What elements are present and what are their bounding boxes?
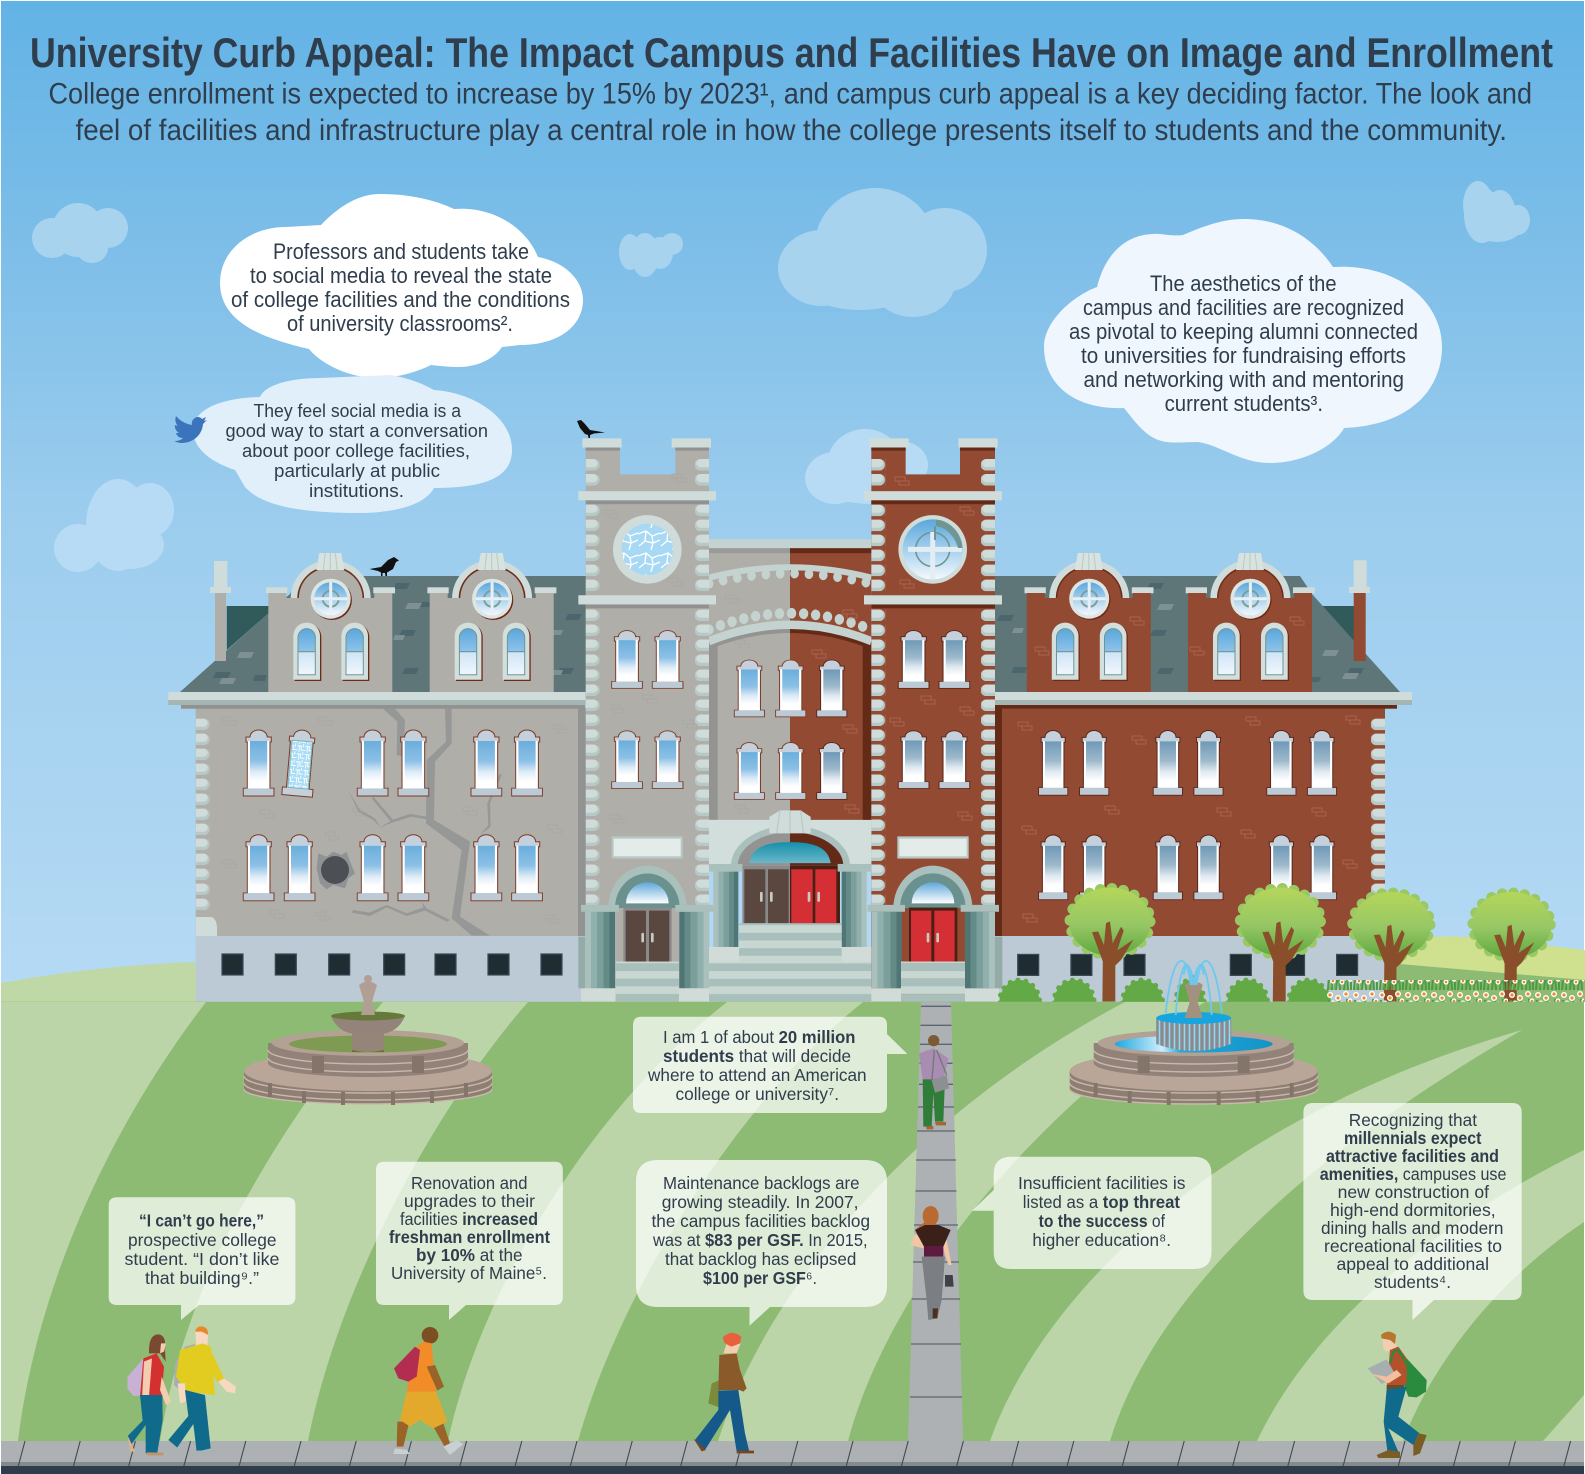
lower arch (709, 613, 871, 641)
cloud text: of college facilities and the conditions (231, 287, 570, 312)
bubble text: millennials expect (1344, 1128, 1482, 1148)
tower quoins (586, 459, 995, 906)
bubble text: student. “I don’t like (124, 1249, 280, 1269)
cloud text (226, 400, 488, 501)
person: girl with lilac backpack (127, 1334, 171, 1455)
entrances (578, 810, 1002, 1002)
hole in wall (317, 852, 355, 889)
person: student on phone on path (919, 1035, 949, 1129)
central towers and walls (578, 438, 1002, 1002)
cloud text: as pivotal to keeping alumni connected (1069, 319, 1418, 344)
speech bubble: 20 million students (633, 1017, 907, 1113)
bubble text: prospective college (128, 1230, 276, 1250)
bird on tower (577, 420, 605, 438)
speech bubble: millennials (1303, 1103, 1522, 1320)
cloud text: current students³. (1165, 391, 1323, 416)
bubble text: students⁴. (1374, 1272, 1451, 1292)
right cornice (995, 692, 1412, 709)
bubble text: I am 1 of about 20 million (663, 1027, 855, 1047)
bubble text: freshman enrollment (389, 1227, 550, 1247)
cloud text: to social media to reveal the state (250, 263, 552, 288)
shaded strips beside entrances (578, 937, 1002, 988)
tree 2 (1239, 888, 1321, 1002)
person: woman walking on path (911, 1206, 954, 1320)
cloud text: of university classrooms². (287, 311, 513, 336)
bubble text (647, 1027, 867, 1104)
cloud text: particularly at public (274, 460, 440, 481)
left tower entrance (581, 866, 714, 1002)
tree 3 (1352, 892, 1431, 1002)
bubble text: new construction of (1338, 1182, 1489, 1202)
trees (1069, 888, 1551, 1002)
right wing (995, 617, 1412, 1002)
bubble text: Renovation and (411, 1173, 528, 1193)
bubble text: listed as a top threat (1023, 1192, 1180, 1212)
fountain column (331, 975, 405, 1052)
tower and centre windows (612, 630, 970, 799)
bubble text (652, 1173, 870, 1288)
right fountain, running (1070, 961, 1318, 1105)
cloud text: to universities for fundraising efforts (1081, 343, 1406, 368)
sky (1, 1, 1584, 1002)
centre section wall (709, 539, 871, 820)
speech bubble: renovation (376, 1162, 563, 1320)
left wing windows, lower row (243, 835, 542, 901)
right wing base (995, 936, 1385, 1002)
right basement windows (1018, 954, 1358, 975)
main portico (709, 810, 871, 1002)
left fountain, dry and mossy (244, 975, 492, 1105)
right roof (995, 576, 1400, 692)
left dormers (266, 553, 556, 692)
pool (1115, 1036, 1273, 1052)
curb strip (1, 1466, 1584, 1474)
person: student with green backpack (1368, 1332, 1427, 1458)
cloud text: good way to start a conversation (226, 420, 488, 441)
cracked clock window (613, 515, 682, 584)
red brick marks (1018, 617, 1360, 922)
speech bubble: top threat (972, 1157, 1212, 1269)
bubble text: by 10% at the (416, 1245, 522, 1265)
icon: twitter bird (174, 416, 207, 443)
left wing windows, upper row (243, 730, 542, 796)
red tower wall (871, 448, 995, 1002)
left wing quoins (196, 719, 210, 914)
bubble text: “I can’t go here,” (139, 1211, 264, 1231)
person: boy in yellow shirt (168, 1326, 236, 1455)
water spray (1166, 961, 1222, 1015)
bubble text: attractive facilities and (1326, 1146, 1499, 1166)
upper arch (709, 567, 871, 584)
bubble text (389, 1173, 550, 1283)
red tower caps and bands (864, 438, 1002, 608)
bubble text: dining halls and modern (1321, 1218, 1503, 1238)
bubble text: was at $83 per GSF. In 2015, (652, 1230, 868, 1250)
corner stone (196, 917, 217, 936)
cloud text: and networking with and mentoring (1084, 367, 1404, 392)
brick marks (222, 717, 567, 923)
wall cracks (348, 709, 502, 936)
bubble text: higher education⁸. (1032, 1230, 1171, 1250)
bubble text: Recognizing that (1349, 1110, 1477, 1130)
bubble text (1320, 1110, 1506, 1292)
hills (1, 937, 1585, 1002)
bubble text: upgrades to their (404, 1191, 535, 1211)
cloud text: about poor college facilities, (242, 440, 470, 461)
lawn (1, 1002, 1584, 1442)
intact clock window (898, 515, 967, 584)
bubble text: college or university⁷. (676, 1084, 839, 1104)
intro text (48, 78, 1532, 147)
bubble text: recreational facilities to (1324, 1236, 1502, 1256)
cloud text: They feel social media is a (254, 400, 462, 421)
left basement windows (222, 954, 562, 975)
cloud callout: aesthetics and alumni (1044, 219, 1442, 463)
right wing windows, lower row (1039, 835, 1337, 900)
bubble text: amenities, campuses use (1320, 1164, 1506, 1184)
speech bubble: I can't go here (109, 1197, 295, 1320)
right chimney (1349, 560, 1370, 661)
tree 1 (1069, 888, 1151, 1002)
cloud callout: social media (220, 194, 583, 378)
bubble text (1018, 1173, 1186, 1250)
bubble text: high-end dormitories, (1330, 1200, 1496, 1220)
cloud text (1069, 271, 1418, 416)
bubble text: appeal to additional (1336, 1254, 1489, 1274)
speech bubble: maintenance backlogs (636, 1160, 887, 1326)
cornice (168, 692, 585, 709)
sidewalk (1, 1441, 1584, 1474)
right wing windows, upper row (1039, 730, 1337, 795)
bubble text: students that will decide (663, 1046, 851, 1066)
person: woman with red hair (693, 1333, 754, 1453)
sign panels (613, 838, 968, 857)
bubble text: the campus facilities backlog (652, 1211, 870, 1231)
background clouds (32, 181, 1530, 572)
cloud callout: conversation (193, 375, 512, 513)
grey tower caps and bands (578, 438, 716, 608)
stagnant water (289, 1036, 447, 1052)
bubble text: University of Maine⁵. (391, 1263, 547, 1283)
bubble text: Insufficient facilities is (1018, 1173, 1186, 1193)
right tower entrance (867, 866, 999, 1002)
left roof (180, 576, 586, 692)
left chimney (210, 561, 231, 661)
bubble text: that building⁹.” (145, 1268, 259, 1288)
intro text: feel of facilities and infrastructure play a central role in how the college presents itself to students and the community. (76, 114, 1507, 147)
left wing (168, 692, 586, 1002)
central walkway (908, 1002, 963, 1441)
shrubs (1000, 980, 1328, 1024)
bubble text: $100 per GSF⁶. (703, 1268, 817, 1288)
bubble text: Maintenance backlogs are (663, 1173, 860, 1193)
right wing quoins (1371, 719, 1385, 914)
bubble text: that backlog has eclipsed (665, 1249, 856, 1269)
tree 4 (1472, 892, 1551, 1002)
bubble text: to the success of (1039, 1211, 1165, 1231)
cloud text: Professors and students take (273, 239, 529, 264)
bubble text (124, 1211, 280, 1288)
bird on roof (370, 557, 399, 576)
person: student in orange shirt (393, 1327, 463, 1455)
tower brick marks (604, 474, 974, 823)
left wing base (196, 936, 586, 1002)
broken tilted window (282, 729, 318, 797)
bubble text: where to attend an American (647, 1065, 867, 1085)
cloud text: The aesthetics of the (1150, 271, 1336, 296)
cloud text: institutions. (309, 480, 404, 501)
cloud text (231, 239, 570, 336)
lawn stripes (1, 1002, 1584, 1441)
water curtain (1156, 975, 1231, 1051)
grey tower wall (586, 448, 709, 1002)
cloud text: campus and facilities are recognized (1083, 295, 1404, 320)
flower bed (1326, 980, 1584, 1002)
right dormers (1024, 553, 1315, 692)
bubble text: facilities increased (400, 1209, 538, 1229)
bubble text: growing steadily. In 2007, (662, 1192, 858, 1212)
